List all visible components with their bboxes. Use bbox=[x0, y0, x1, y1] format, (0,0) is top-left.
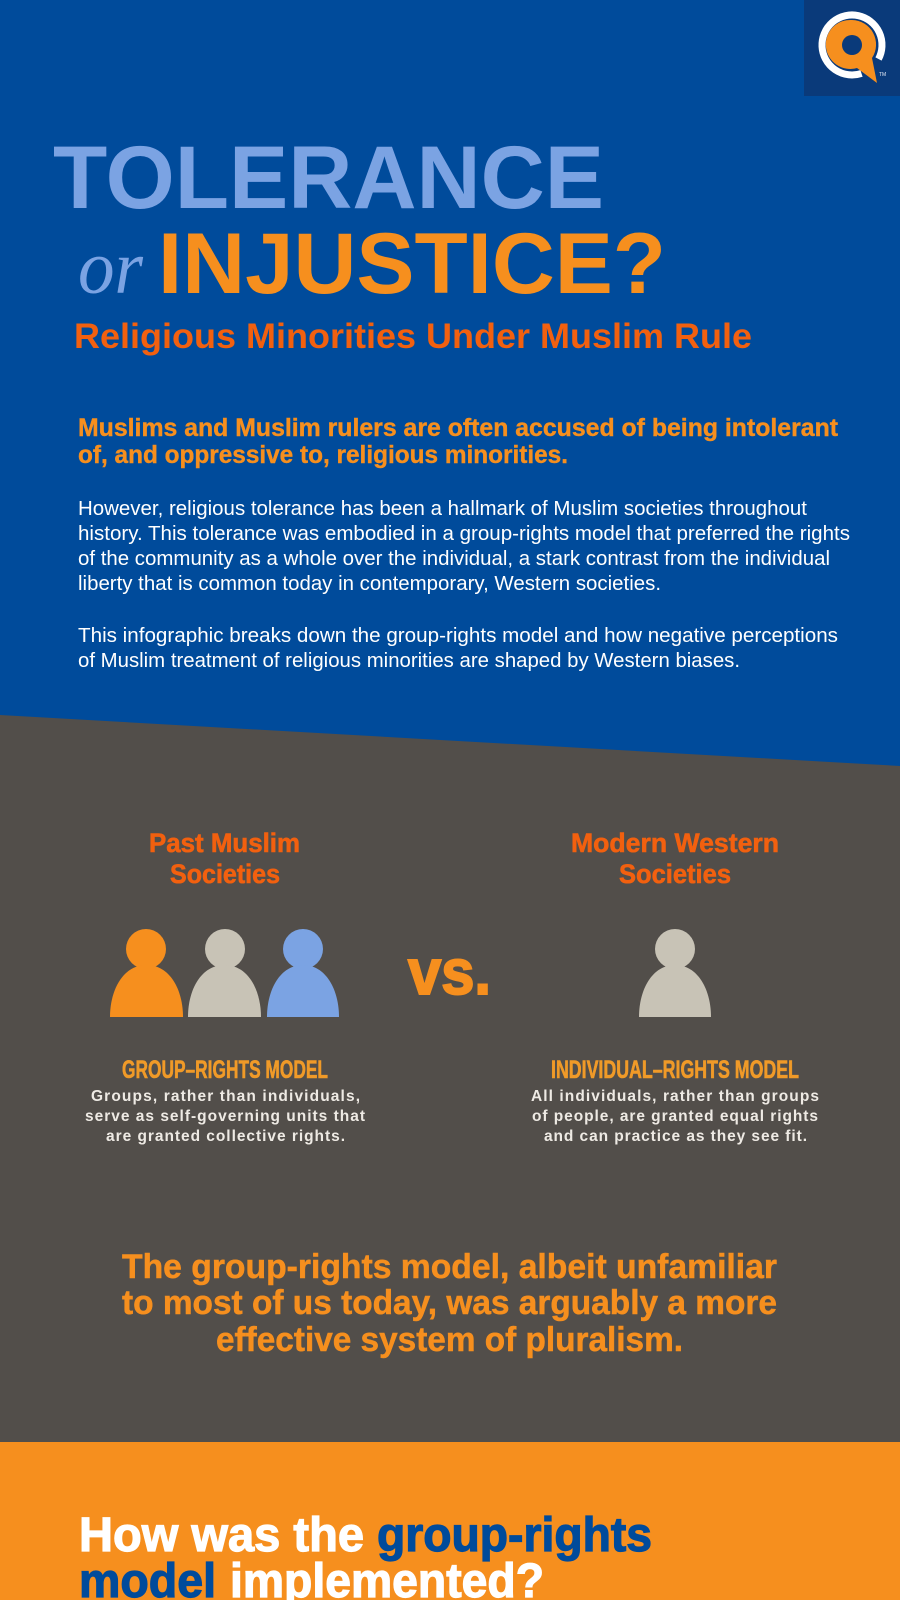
panel: orange implementation background bbox=[0, 1442, 900, 1600]
panel: blue header background bbox=[0, 0, 900, 770]
lead statement: Muslims and Muslim rulers are often accused of being intolerant bbox=[78, 414, 839, 442]
lead statement: of, and oppressive to, religious minorities. bbox=[78, 441, 568, 469]
second paragraph: This infographic breaks down the group-rights model and how negative perceptions bbox=[78, 624, 838, 647]
second paragraph: of Muslim treatment of religious minorities are shaped by Western biases. bbox=[78, 649, 740, 672]
heading: modern western societies: Modern Western bbox=[571, 828, 779, 858]
group-rights heading: GROUP–RIGHTS MODEL bbox=[122, 1056, 328, 1084]
title: tolerance: TOLERANCE bbox=[53, 127, 604, 227]
intro paragraph bbox=[78, 497, 850, 595]
section heading: implementation: group-rights bbox=[377, 1509, 652, 1562]
icon: logo: TM bbox=[879, 72, 886, 78]
intro paragraph: However, religious tolerance has been a hallmark of Muslim societies throughout bbox=[78, 497, 807, 520]
group-rights text: Groups, rather than individuals, bbox=[91, 1088, 360, 1105]
title: or: or bbox=[78, 226, 143, 310]
second paragraph bbox=[78, 624, 838, 672]
section heading: implementation: How was the bbox=[79, 1509, 364, 1562]
heading: past muslim societies: Societies bbox=[170, 859, 280, 889]
group-rights text: are granted collective rights. bbox=[106, 1128, 345, 1145]
heading: past muslim societies bbox=[149, 828, 300, 889]
group-rights text: serve as self-governing units that bbox=[85, 1108, 365, 1125]
individual-rights text: of people, are granted equal rights bbox=[532, 1108, 818, 1125]
icon: three people group bbox=[110, 929, 339, 1017]
callout statement bbox=[122, 1248, 777, 1359]
intro paragraph: of the community as a whole over the individual, a stark contrast from the individual bbox=[78, 547, 830, 570]
icon: orange person bbox=[110, 929, 183, 1017]
panel: gray comparison background bbox=[0, 715, 900, 1442]
title: injustice: INJUSTICE? bbox=[158, 216, 666, 312]
icon: logo bbox=[804, 0, 900, 96]
lead statement bbox=[78, 414, 839, 469]
vs label: vs. bbox=[408, 936, 491, 1008]
intro paragraph: history. This tolerance was embodied in a group-rights model that preferred the rights bbox=[78, 522, 850, 545]
heading: past muslim societies: Past Muslim bbox=[149, 828, 300, 858]
heading: modern western societies: Societies bbox=[619, 859, 731, 889]
individual-rights text: All individuals, rather than groups bbox=[531, 1088, 819, 1105]
group-rights description bbox=[85, 1056, 365, 1145]
callout statement: The group-rights model, albeit unfamiliar bbox=[122, 1248, 777, 1286]
group-rights text bbox=[85, 1088, 365, 1145]
individual-rights text bbox=[531, 1088, 819, 1145]
heading: modern western societies bbox=[571, 828, 779, 889]
icon: blue person bbox=[267, 929, 339, 1017]
individual-rights description bbox=[531, 1056, 819, 1145]
section heading: implementation bbox=[79, 1509, 652, 1600]
intro paragraph: liberty that is common today in contemporary, Western societies. bbox=[78, 572, 661, 595]
individual-rights text: and can practice as they see fit. bbox=[544, 1128, 807, 1145]
individual-rights heading: INDIVIDUAL–RIGHTS MODEL bbox=[551, 1056, 799, 1084]
callout statement: effective system of pluralism. bbox=[216, 1321, 683, 1359]
icon: single person bbox=[639, 929, 711, 1017]
callout statement: to most of us today, was arguably a more bbox=[122, 1284, 777, 1322]
subtitle: Religious Minorities Under Muslim Rule bbox=[74, 317, 752, 356]
icon: beige person bbox=[188, 929, 261, 1017]
